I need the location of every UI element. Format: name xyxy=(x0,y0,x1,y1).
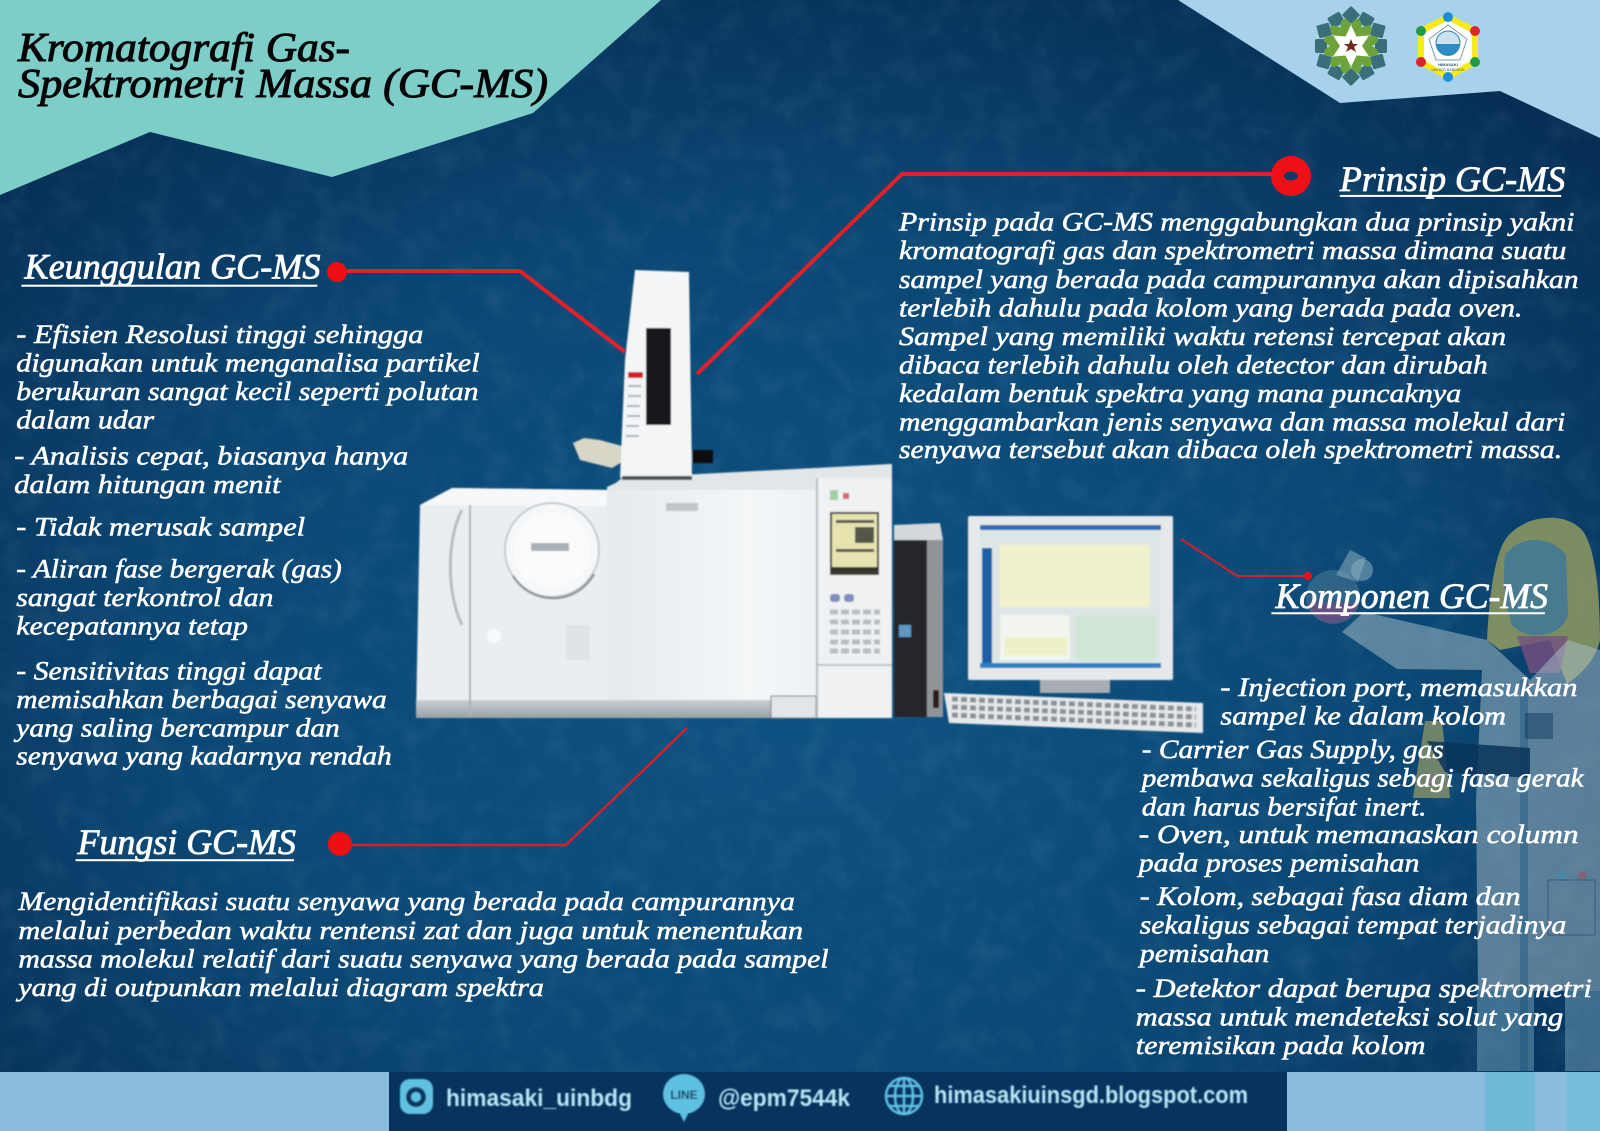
text: keunggulan list xyxy=(13,319,480,770)
handle: line: @epm7544k xyxy=(718,1085,851,1112)
text: fungsi xyxy=(15,886,829,1002)
text: komponen list: - Injection port, memasukkan xyxy=(1220,672,1578,702)
logo: hexagon emblem xyxy=(1416,12,1480,82)
text: komponen list: - Kolom, sebagai fasa diam dan xyxy=(1140,881,1520,911)
social footer xyxy=(400,1074,1248,1122)
mass spectrometer unit xyxy=(416,488,612,718)
scientist shirt stripe xyxy=(1520,680,1528,1071)
text: komponen list: sampel ke dalam kolom xyxy=(1220,700,1506,730)
computer monitor xyxy=(968,516,1173,693)
title: Kromatografi Gas- xyxy=(17,24,350,70)
column tower xyxy=(573,270,713,480)
text: keunggulan list: sangat terkontrol dan xyxy=(16,582,273,612)
text: fungsi: Mengidentifikasi suatu senyawa yang berada pada campurannya xyxy=(17,886,795,916)
icon: instagram xyxy=(400,1079,433,1114)
scientist lower flask xyxy=(1413,721,1450,798)
text: keunggulan list: dalam udar xyxy=(16,405,155,435)
text: prinsip: kedalam bentuk spektra yang mana puncaknya xyxy=(899,378,1461,408)
icon: line xyxy=(663,1074,705,1122)
text: prinsip: kromatografi gas dan spektrometri massa dimana suatu xyxy=(899,235,1566,265)
text: keunggulan list: senyawa yang kadarnya rendah xyxy=(16,740,392,770)
text: prinsip: dibaca terlebih dahulu oleh detector dan dirubah xyxy=(899,349,1488,379)
icon: line: LINE xyxy=(670,1088,698,1102)
illustration: scientist xyxy=(1306,518,1600,1071)
text: komponen list: massa untuk mendeteksi solut yang xyxy=(1136,1002,1563,1032)
keyboard xyxy=(944,693,1203,733)
text: fungsi: yang di outpunkan melalui diagram spektra xyxy=(15,972,544,1002)
text: prinsip: terlebih dahulu pada kolom yang berada pada oven. xyxy=(899,292,1522,322)
text: prinsip xyxy=(898,207,1579,464)
text: fungsi: massa molekul relatif dari suatu senyawa yang berada pada sampel xyxy=(18,943,829,973)
text: komponen list: - Detektor dapat berupa spektrometri xyxy=(1136,973,1592,1003)
text: komponen list: pada proses pemisahan xyxy=(1137,847,1419,877)
heading: prinsip: Prinsip GC-MS xyxy=(1339,159,1565,199)
computer tower xyxy=(894,523,943,717)
connector: fungsi xyxy=(328,728,687,856)
text: keunggulan list: memisahkan berbagai senyawa xyxy=(16,684,387,714)
top right corner shape xyxy=(1178,0,1600,138)
title: Spektrometri Massa (GC-MS) xyxy=(18,60,548,106)
text: keunggulan list: yang saling bercampur dan xyxy=(13,713,340,743)
scientist face xyxy=(1504,540,1568,635)
text: komponen list: dan harus bersifat inert. xyxy=(1142,791,1427,821)
text: fungsi: melalui perbedan waktu rentensi zat dan juga untuk menentukan xyxy=(18,915,803,945)
logo: flower emblem xyxy=(1315,6,1387,86)
control panel xyxy=(816,478,892,718)
heading: fungsi: Fungsi GC-MS xyxy=(77,822,296,862)
text: keunggulan list: berukuran sangat kecil seperti polutan xyxy=(16,376,479,406)
text: keunggulan list: - Aliran fase bergerak (gas) xyxy=(16,554,342,584)
handle: blog: himasakiuinsgd.blogspot.com xyxy=(934,1082,1248,1109)
scientist neck xyxy=(1517,636,1568,673)
text: komponen list: - Oven, untuk memanaskan column xyxy=(1139,819,1579,849)
text: komponen list: pemisahan xyxy=(1138,938,1269,968)
text: komponen list: - Carrier Gas Supply, gas xyxy=(1142,734,1444,764)
scientist breast pocket xyxy=(1525,713,1553,739)
text: keunggulan list: - Sensitivitas tinggi dapat xyxy=(16,656,322,686)
heading: komponen: Komponen GC-MS xyxy=(1275,576,1548,616)
text: keunggulan list: kecepatannya tetap xyxy=(16,611,248,641)
heading: keunggulan: Keunggulan GC-MS xyxy=(23,247,321,287)
scientist round flask xyxy=(1306,550,1373,624)
text: keunggulan list: - Tidak merusak sampel xyxy=(16,512,305,542)
bottom footer bar xyxy=(0,1072,1600,1131)
title banner shape xyxy=(0,0,661,195)
text: keunggulan list: - Efisien Resolusi tinggi sehingga xyxy=(16,319,423,349)
icon: globe xyxy=(886,1078,922,1114)
text: prinsip: Sampel yang memiliki waktu retensi tercepat akan xyxy=(899,321,1506,351)
text: keunggulan list: dalam hitungan menit xyxy=(14,469,281,499)
text: prinsip: senyawa tersebut akan dibaca oleh spektrometri massa. xyxy=(899,434,1562,464)
scientist dark sleeve xyxy=(1427,741,1530,778)
connector: prinsip xyxy=(697,156,1311,374)
connector: keunggulan xyxy=(327,262,625,352)
text: komponen list: sekaligus sebagai tempat terjadinya xyxy=(1140,910,1566,940)
text: komponen list: pembawa sekaligus sebagi fasa gerak xyxy=(1140,763,1585,793)
scientist lower pocket xyxy=(1548,872,1595,935)
handle: instagram: himasaki_uinbdg xyxy=(446,1085,632,1112)
text: prinsip: menggambarkan jenis senyawa dan massa molekul dari xyxy=(899,407,1565,437)
text: komponen list xyxy=(1136,672,1592,1060)
text: keunggulan list: digunakan untuk menganalisa partikel xyxy=(16,347,480,377)
text: prinsip: sampel yang berada pada campurannya akan dipisahkan xyxy=(899,264,1579,294)
text: prinsip: Prinsip pada GC-MS menggabungkan dua prinsip yakni xyxy=(898,207,1574,237)
text: komponen list: teremisikan pada kolom xyxy=(1136,1030,1425,1060)
scientist hair xyxy=(1487,518,1600,684)
logo: hexagon emblem: UIN SGD BANDUNG xyxy=(1431,68,1465,72)
logo: hexagon emblem: HIMASAKI xyxy=(1438,62,1458,67)
gas chromatograph body xyxy=(607,464,892,718)
scientist lab coat xyxy=(1342,612,1600,991)
text: keunggulan list: - Analisis cepat, biasanya hanya xyxy=(14,440,408,470)
title xyxy=(17,24,548,106)
illustration: GC-MS instrument xyxy=(416,270,1203,733)
scientist legs xyxy=(1477,991,1600,1071)
connector: komponen xyxy=(1181,539,1312,580)
